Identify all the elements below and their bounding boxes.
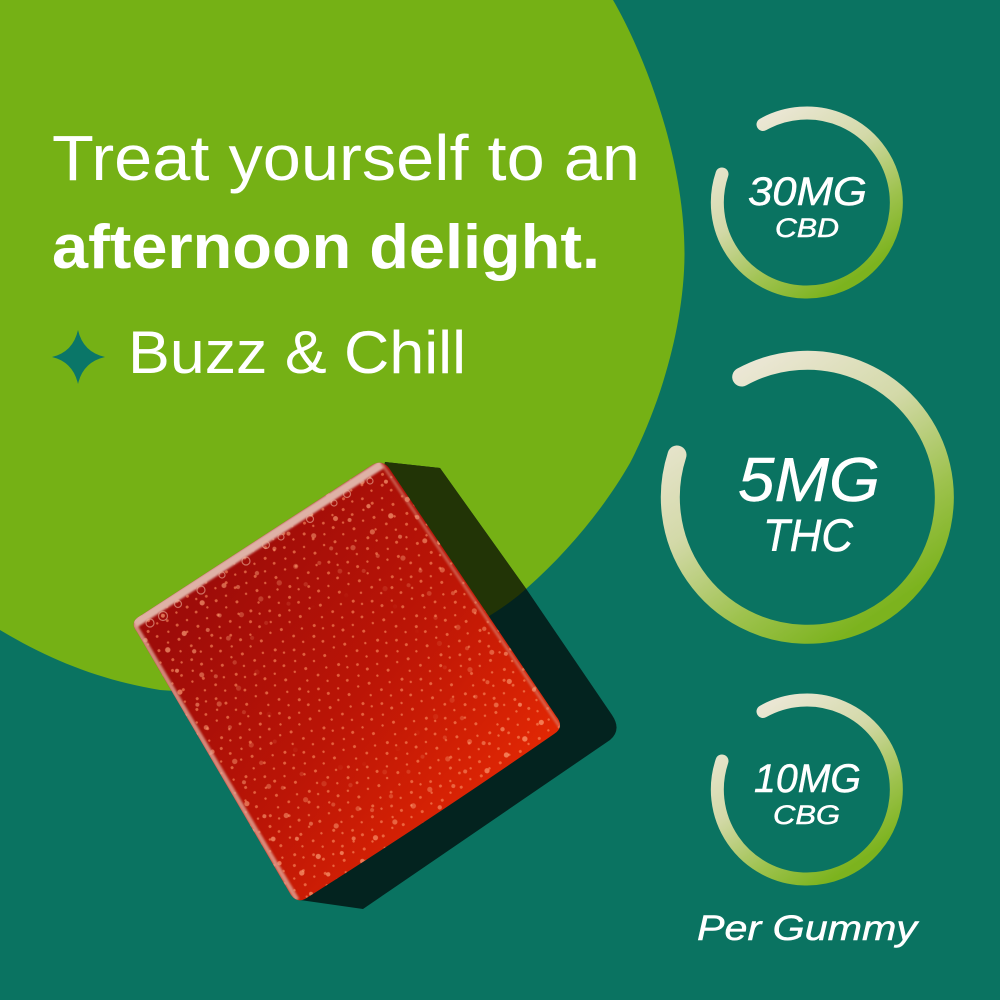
amount: 30MG — [748, 170, 867, 214]
gummy sugar edge — [134, 464, 560, 900]
gummy candy — [120, 450, 570, 910]
ring: 10mg CBG — [717, 700, 896, 879]
ring arc — [717, 700, 896, 879]
headline line two: afternoon delight. — [52, 213, 600, 282]
ring: 30mg CBD — [717, 113, 896, 292]
cannabinoid: THC — [763, 510, 853, 561]
headline line one: Treat yourself to an — [52, 122, 640, 194]
ring: 5mg THC — [670, 360, 944, 634]
cannabinoid: CBD — [775, 213, 839, 243]
cannabinoid: CBG — [773, 800, 840, 830]
ring arc — [670, 360, 944, 634]
amount: 10MG — [754, 757, 861, 801]
shadow over green — [384, 462, 526, 616]
gummy bubbles — [138, 466, 560, 898]
icon: sparkle star — [52, 330, 105, 384]
ring arc — [717, 113, 896, 292]
green blob — [0, 0, 685, 691]
gummy shadow — [300, 462, 617, 909]
subheading: Buzz & Chill — [128, 319, 466, 386]
gummy body — [134, 463, 560, 900]
per gummy note: Per Gummy — [697, 909, 920, 948]
amount: 5MG — [738, 446, 880, 515]
